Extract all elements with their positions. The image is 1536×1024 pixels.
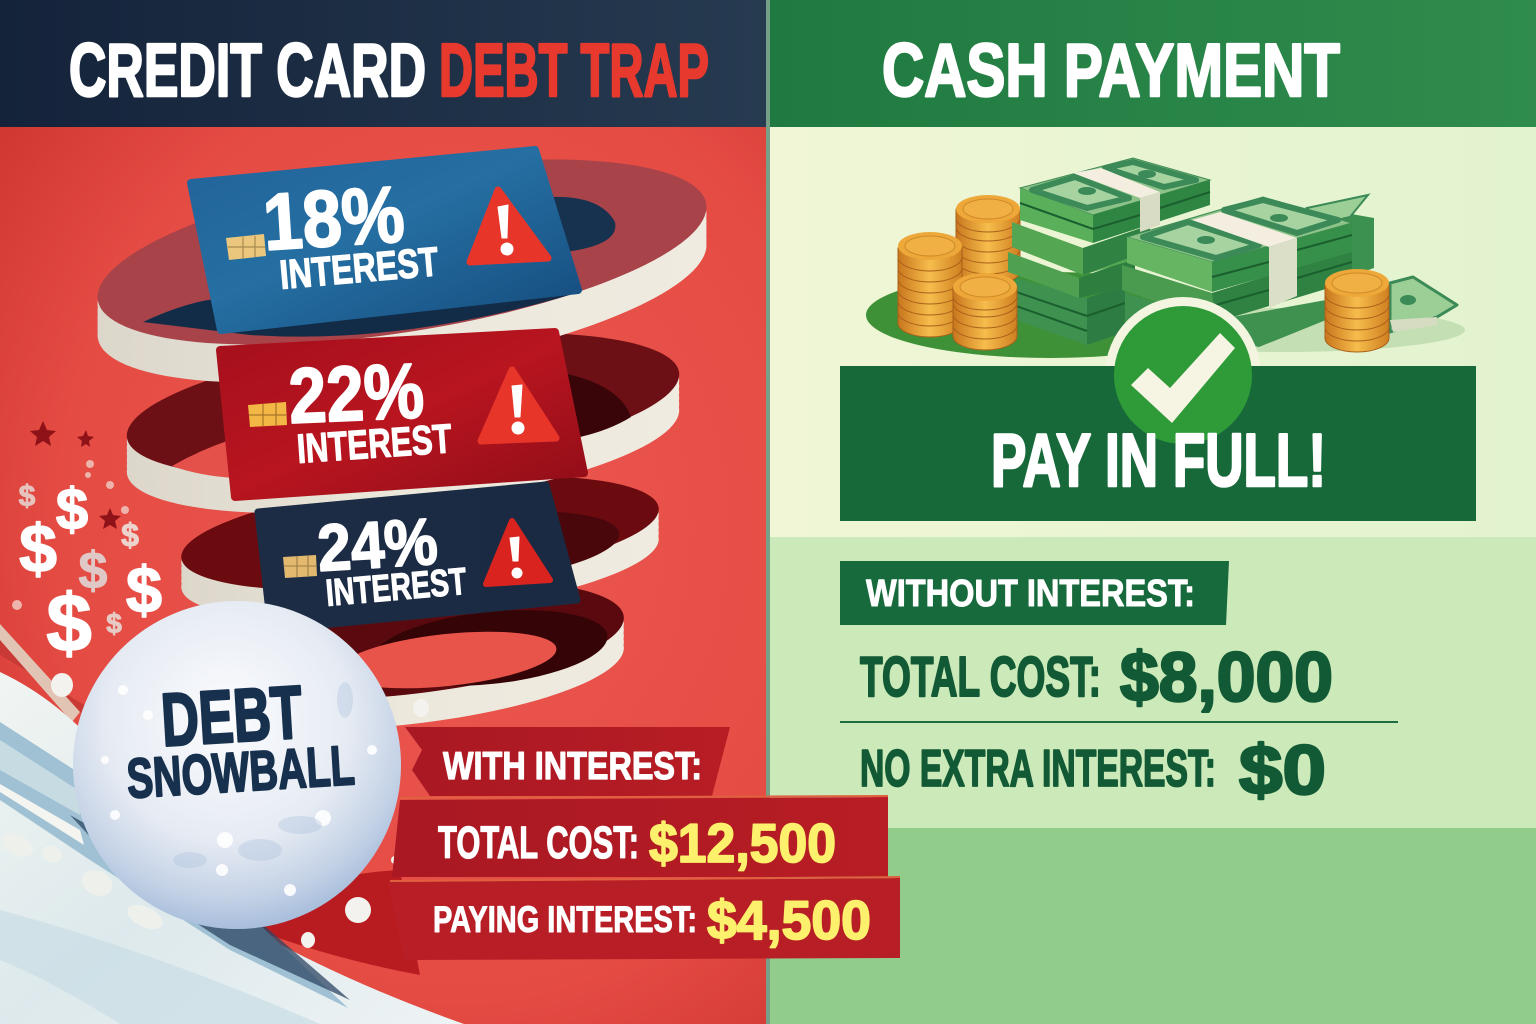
- row: no extra interest: $0: [1239, 731, 1326, 809]
- rate: 24%: 24%: [315, 504, 440, 585]
- icon: chip: [248, 402, 287, 427]
- icon: warning: [470, 190, 548, 262]
- title: credit card debt trap: CREDIT CARD: [69, 28, 426, 112]
- floating dollar signs: $: [46, 578, 92, 669]
- tag: with interest: [405, 727, 730, 796]
- snowball label: SNOWBALL: [125, 733, 356, 810]
- floating dollar signs: $: [126, 553, 162, 626]
- banner: paying interest: [388, 877, 900, 960]
- panel: credit card debt trap: [0, 0, 766, 1024]
- stars and debris: [12, 421, 129, 610]
- icon: check mark: [1114, 306, 1252, 444]
- row: total cost: $8,000: [1120, 638, 1333, 716]
- rate: 18%: 18%: [260, 169, 407, 267]
- icon: chip: [283, 555, 317, 578]
- row: no extra interest: NO EXTRA INTEREST:: [860, 740, 1216, 798]
- rate: 22%: 22%: [287, 346, 426, 440]
- banner: paying interest: $4,500: [707, 889, 871, 951]
- coin stack: back: [956, 195, 1020, 285]
- spiral ribbon: top coil: [85, 125, 719, 417]
- row: total cost: TOTAL COST:: [860, 645, 1101, 709]
- card: 24% interest: [258, 485, 577, 630]
- banner: pay in full: [840, 306, 1476, 521]
- snowball: [73, 601, 401, 929]
- icon: warning: [486, 521, 550, 584]
- illustration: money pile: [866, 158, 1465, 358]
- banner: total cost: TOTAL COST:: [438, 817, 639, 868]
- tag: with interest: WITH INTEREST:: [443, 745, 702, 788]
- icon: chip: [226, 234, 266, 260]
- floating dollar signs: $: [19, 511, 57, 587]
- row: total cost: [860, 638, 1333, 716]
- snowball label: [125, 670, 356, 810]
- floating dollar signs: [19, 477, 162, 669]
- icon ring: check mark backing: [1105, 297, 1261, 453]
- label: interest: INTEREST: [295, 415, 453, 472]
- floating dollar signs: $: [19, 480, 36, 513]
- label: interest: INTEREST: [278, 238, 440, 298]
- banner: paying interest: PAYING INTEREST:: [433, 899, 697, 940]
- card: 18% interest: [191, 150, 578, 330]
- floating dollar signs: $: [79, 542, 108, 600]
- row: no extra interest: [860, 731, 1326, 809]
- floating dollar signs: $: [106, 608, 122, 639]
- bill stacks: left: [1008, 158, 1210, 345]
- header bar: right: [770, 0, 1536, 127]
- tag: without interest: WITHOUT INTEREST:: [866, 573, 1195, 615]
- spiral ribbon: third coil: [176, 456, 664, 640]
- title: cash payment: CASH PAYMENT: [882, 28, 1340, 112]
- floating dollar signs: $: [56, 477, 88, 542]
- banner: total cost: $12,500: [649, 812, 836, 874]
- snowy slope: [0, 624, 464, 1024]
- icon: warning: [481, 370, 556, 441]
- coin stack: left: [898, 232, 962, 337]
- banner: total cost: [392, 796, 888, 877]
- spiral ribbon: second coil: [119, 308, 687, 538]
- coin stacks: front: [953, 269, 1389, 352]
- panel: cash payment: [766, 0, 1536, 1024]
- tag: without interest: [840, 561, 1229, 625]
- card: 22% interest: [220, 332, 584, 497]
- banner text: PAY IN FULL!: [991, 418, 1326, 502]
- header bar: left: [0, 0, 766, 127]
- label: interest: INTEREST: [324, 561, 468, 615]
- floating dollar signs: $: [121, 517, 139, 553]
- snowball label: DEBT: [159, 670, 305, 762]
- title: credit card debt trap: DEBT TRAP: [439, 28, 709, 112]
- bill stacks: right: [1122, 195, 1457, 347]
- spiral ribbon: lowest coil: [170, 562, 630, 748]
